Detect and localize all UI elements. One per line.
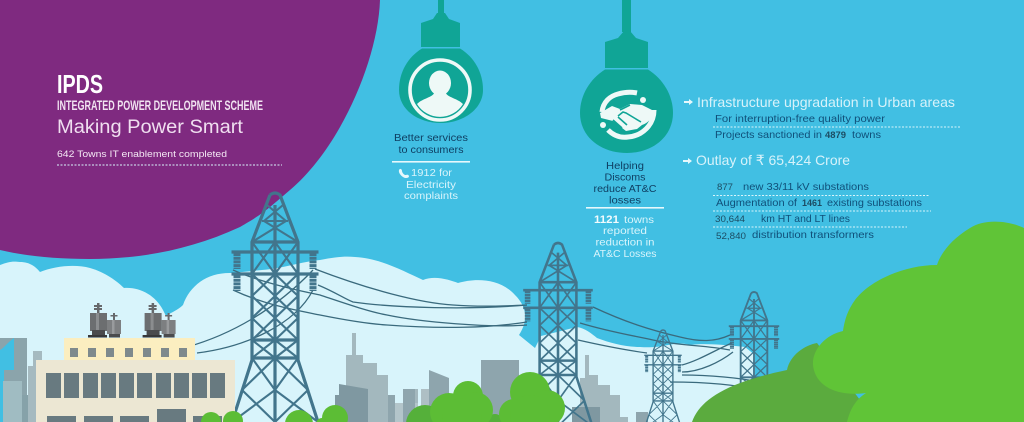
text: better services [392, 132, 470, 202]
clouds [0, 257, 755, 422]
list: infrastructure upgradation: Projects sanctioned in [715, 129, 822, 141]
text: helping discoms [586, 160, 664, 260]
text: better services: complaints [404, 190, 458, 202]
text: helping discoms: reduction in [596, 236, 655, 248]
text: better services: Electricity [406, 179, 457, 191]
icon: distant power tower [729, 292, 779, 422]
list: outlay: 1461 [802, 198, 823, 209]
list: infrastructure upgradation: 4879 [825, 130, 846, 141]
list: infrastructure upgradation: towns [852, 129, 881, 141]
icon: middle power tower [523, 243, 593, 422]
text: helping discoms: Helping [606, 160, 644, 172]
dark green bush [692, 343, 860, 422]
icon: bulb with handshake [580, 0, 673, 153]
list: outlay: Outlay of ₹ 65,424 Crore [696, 152, 850, 168]
list: outlay: 52,840 [716, 231, 746, 242]
list: outlay: km HT and LT lines [761, 213, 850, 225]
title block [57, 69, 263, 160]
power lines [187, 269, 760, 390]
towns note: 642 Towns IT enablement completed [57, 149, 227, 160]
text: helping discoms: 1121 [594, 214, 619, 226]
list: outlay [683, 152, 931, 242]
text: helping discoms: losses [609, 194, 641, 206]
list: outlay: new 33/11 kV substations [743, 181, 869, 193]
icon: large power tower [232, 193, 318, 422]
heading: IPDS: IPDS [57, 69, 103, 99]
text: better services: Better services [394, 132, 468, 144]
purple title shape [0, 0, 380, 259]
subtitle: Making Power Smart [57, 117, 244, 138]
icon: far power tower [644, 330, 682, 422]
list: infrastructure upgradation [684, 94, 961, 141]
center bushes [201, 372, 565, 422]
heading: scheme name: INTEGRATED POWER DEVELOPMENT SCHEME [57, 97, 263, 113]
text: helping discoms: reported [603, 225, 647, 237]
text: helping discoms: towns [624, 214, 654, 226]
transformers [88, 303, 176, 338]
icon: bulb with consumer [399, 0, 483, 123]
left city buildings [0, 338, 44, 422]
text: helping discoms: Discoms [604, 172, 646, 184]
text: helping discoms: reduce AT&C [594, 183, 657, 195]
list: infrastructure upgradation: Infrastructure upgradation in Urban areas [697, 94, 955, 110]
list: outlay: existing substations [827, 197, 922, 209]
list: outlay: Augmentation of [716, 197, 797, 209]
list: infrastructure upgradation: For interruption-free quality power [715, 113, 886, 125]
bright green bush [813, 222, 1024, 422]
substation building [36, 338, 235, 422]
list: outlay: distribution transformers [752, 229, 874, 241]
center city buildings [335, 333, 648, 422]
text: better services: 1912 for [411, 167, 453, 179]
list: outlay: 877 [717, 182, 733, 193]
text: helping discoms: AT&C Losses [594, 248, 656, 260]
text: better services: to consumers [398, 144, 464, 156]
list: outlay: 30,644 [715, 214, 745, 225]
